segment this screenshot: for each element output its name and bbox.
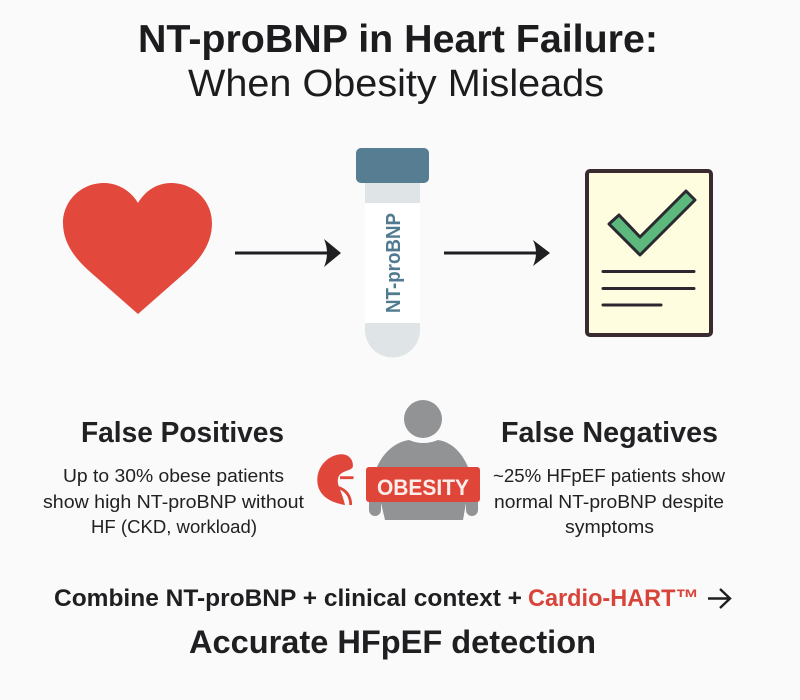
text: false positives detail: Up to 30% obese patients <box>63 466 284 486</box>
icon: heart <box>63 183 212 314</box>
title: NT-proBNP in Heart Failure: <box>138 18 658 61</box>
text: false negatives detail: symptoms <box>565 517 654 537</box>
callout: combined approach: Combine NT-proBNP + clinical context + <box>54 585 522 612</box>
text: false positives detail: show high NT-proBNP without <box>43 492 304 512</box>
text: false positives detail <box>43 466 304 537</box>
text: false negatives detail: normal NT-proBNP despite <box>494 492 724 512</box>
icon: person with obesity badge <box>366 400 480 520</box>
callout: combined approach: Accurate HFpEF detection <box>189 624 596 660</box>
callout: combined approach <box>54 585 730 660</box>
icon: test tube <box>356 148 429 358</box>
icon: test tube: NT-proBNP <box>383 213 405 313</box>
text: false positives detail: HF (CKD, workload) <box>91 517 257 537</box>
icon: kidney <box>317 454 354 505</box>
callout: combined approach: Cardio-HART™ <box>528 585 699 612</box>
title: When Obesity Misleads <box>188 63 604 105</box>
text: false negatives detail: ~25% HFpEF patients show <box>493 466 726 486</box>
heading: false positives: False Positives <box>81 417 284 449</box>
panel: false negatives <box>493 417 726 537</box>
heading: false negatives: False Negatives <box>501 417 718 449</box>
text: false negatives detail <box>493 466 726 537</box>
icon: person with obesity badge: OBESITY <box>377 475 469 500</box>
panel: false positives <box>43 417 304 537</box>
icon: report with check mark <box>587 171 711 335</box>
arrow: heart to test tube <box>235 239 341 267</box>
title <box>138 18 658 105</box>
arrow: test tube to report <box>444 240 550 266</box>
